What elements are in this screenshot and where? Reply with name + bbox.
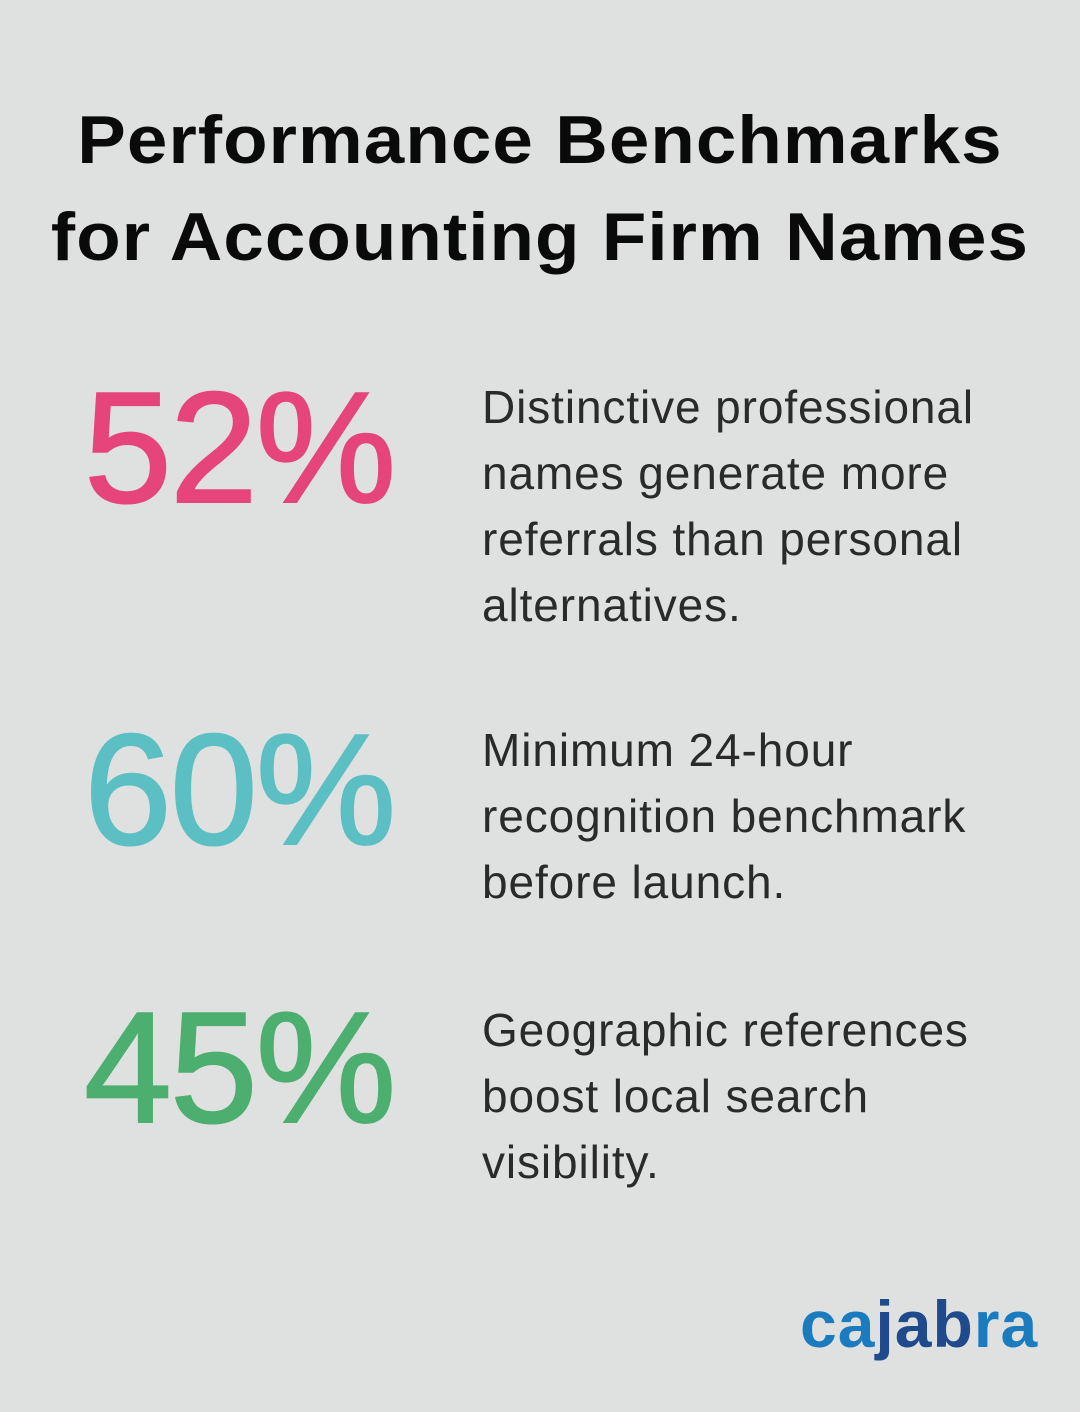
stat: 60%: 60%: [84, 702, 394, 878]
text: stat 2 description: Minimum 24-hour: [482, 724, 853, 776]
text: stat 1 description: referrals than personal: [482, 513, 963, 565]
logo: cajabra: cajabra: [800, 1287, 1038, 1361]
text: stat 1 description: names generate more: [482, 447, 949, 499]
text: stat 1 description: [482, 381, 974, 631]
text: stat 2 description: recognition benchmark: [482, 790, 966, 842]
stat: 52%: 52%: [84, 360, 394, 536]
stat: 45%: 45%: [84, 980, 394, 1156]
title: [51, 102, 1029, 275]
text: stat 2 description: [482, 724, 966, 908]
text: stat 3 description: [482, 1004, 969, 1188]
text: stat 3 description: boost local search: [482, 1070, 869, 1122]
text: stat 1 description: alternatives.: [482, 579, 742, 631]
title: for Accounting Firm Names: [51, 199, 1029, 275]
text: stat 1 description: Distinctive professional: [482, 381, 974, 433]
text: stat 3 description: visibility.: [482, 1136, 660, 1188]
title: Performance Benchmarks: [77, 102, 1003, 178]
text: stat 2 description: before launch.: [482, 856, 786, 908]
text: stat 3 description: Geographic references: [482, 1004, 969, 1056]
